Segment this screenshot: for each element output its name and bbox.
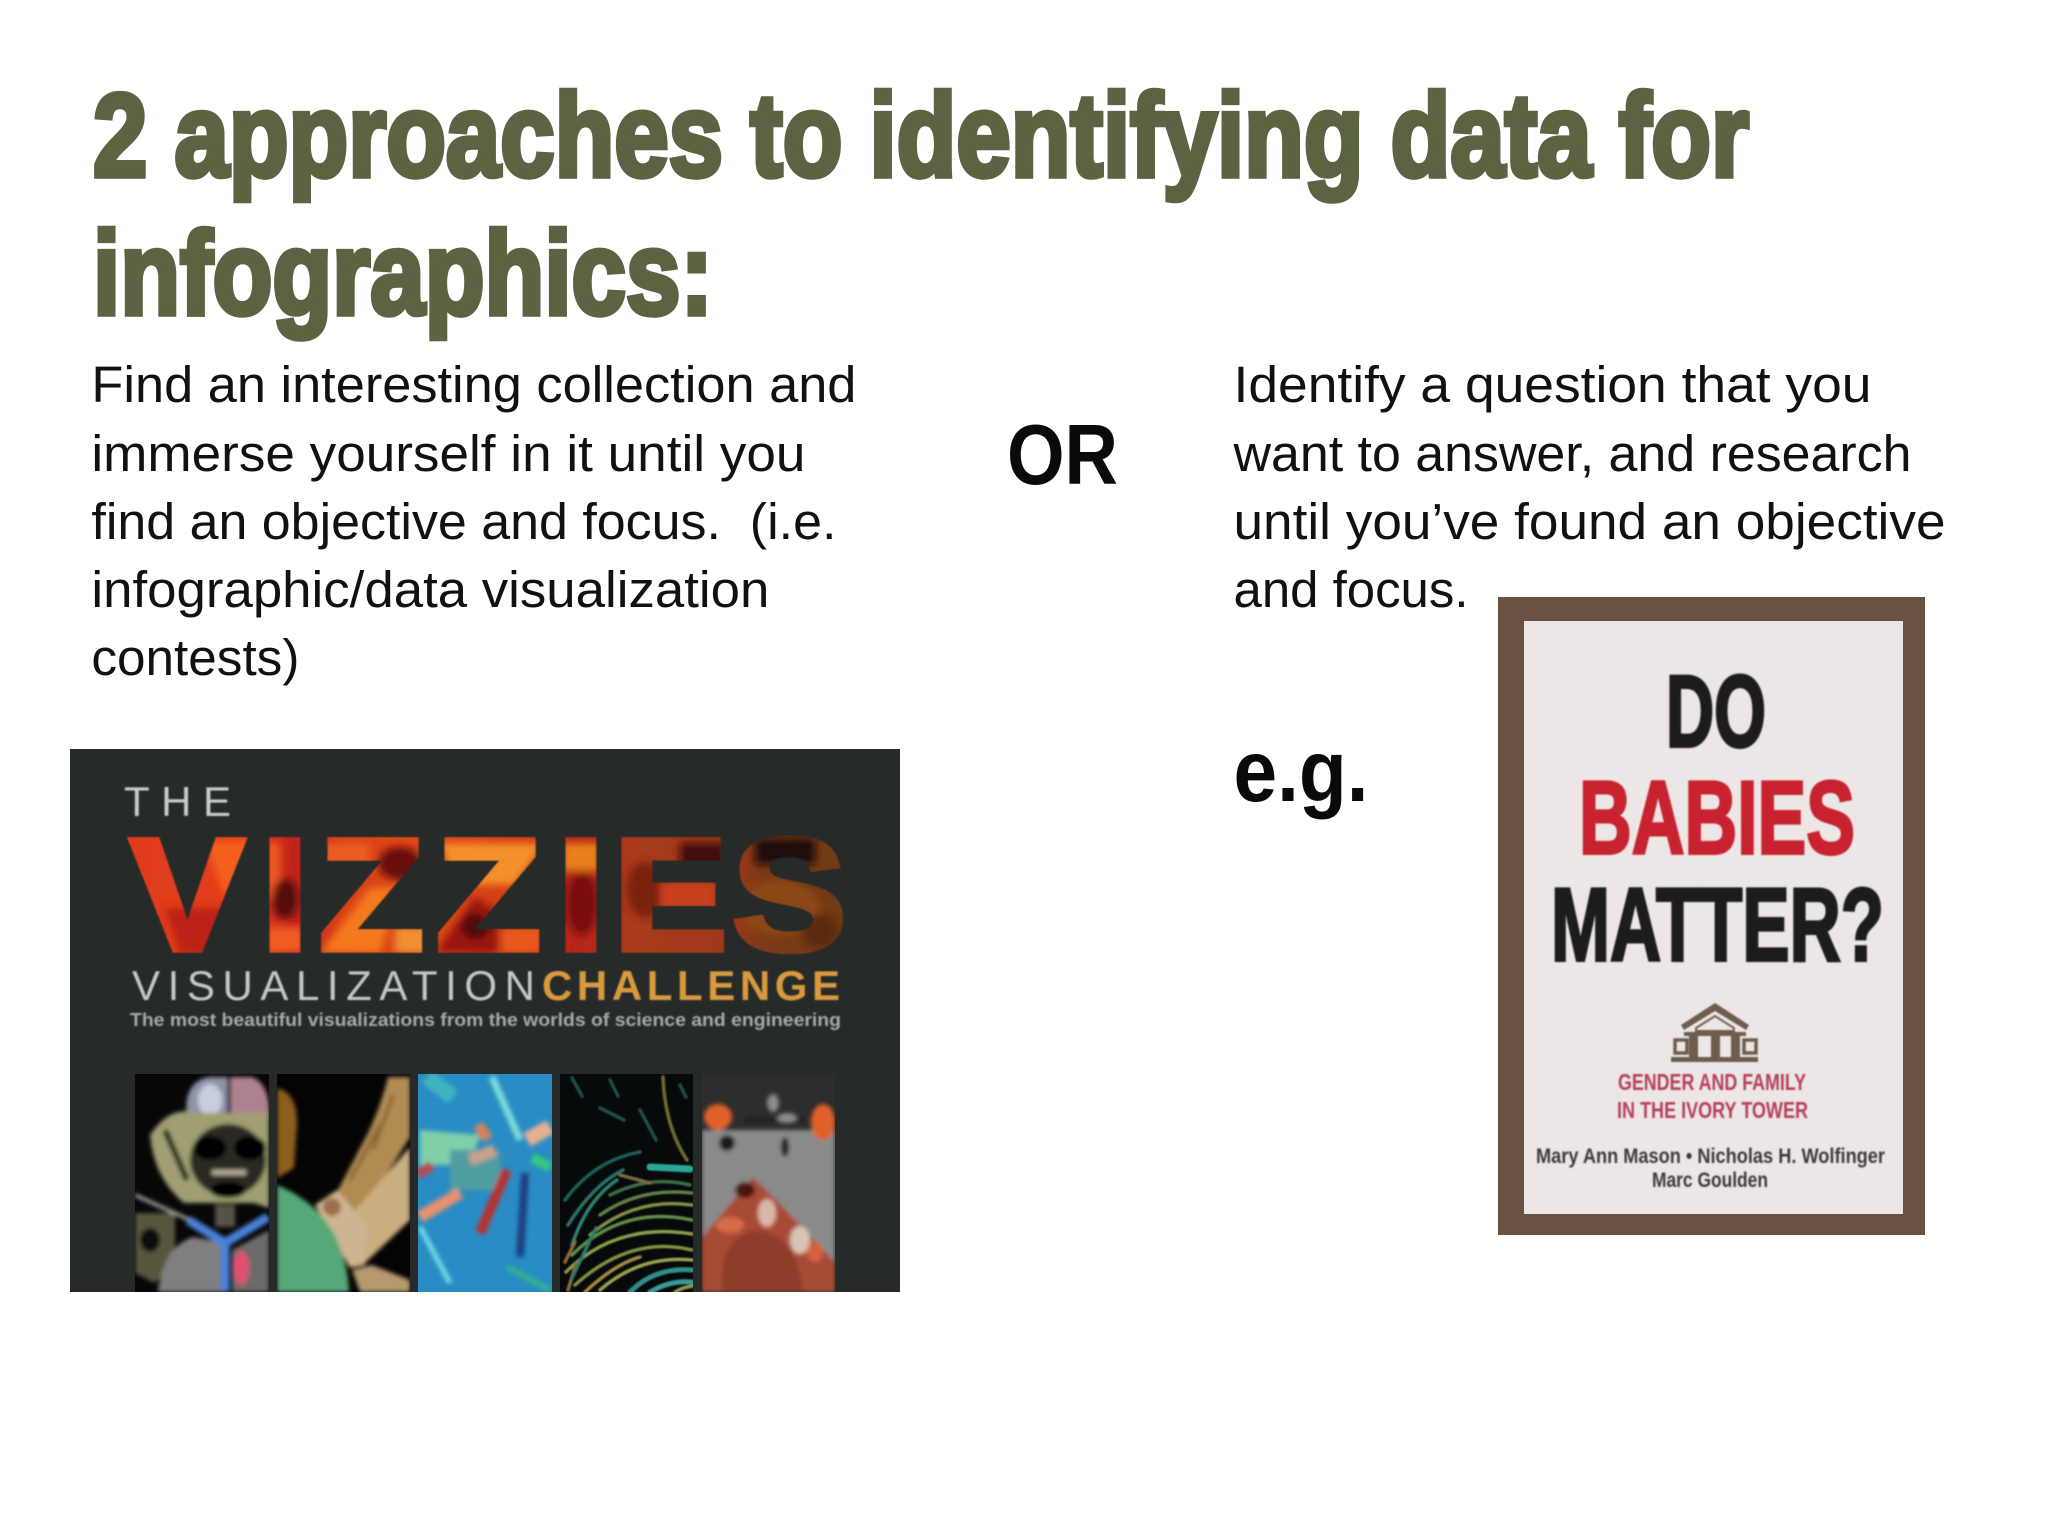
book title: BABIES: BABIES	[1579, 760, 1855, 876]
book authors: Mary Ann Mason • Nicholas H. Wolfinger	[1536, 1145, 1885, 1168]
book subtitle: IN THE IVORY TOWER	[1617, 1097, 1808, 1123]
cover heading: VIZZIES: VIZZIES	[130, 806, 847, 985]
icon: university building	[1671, 1003, 1758, 1062]
panel: Vizzies cover	[70, 749, 900, 1292]
text block: find a collection	[91, 356, 856, 686]
text block: identify a question: and focus.	[1234, 561, 1468, 618]
book authors	[1536, 1145, 1885, 1192]
e.g. label: e.g.	[1234, 723, 1368, 820]
text block: find a collection: contests)	[91, 629, 299, 686]
book subtitle: GENDER AND FAMILY	[1618, 1069, 1806, 1095]
image strip: red and grey cross-section	[702, 1074, 835, 1292]
image strip: blue streaks	[418, 1074, 552, 1292]
book subtitle	[1617, 1069, 1808, 1123]
image strip: coloured filaments	[560, 1074, 693, 1292]
text block: find a collection: immerse yourself in it until you	[91, 425, 805, 482]
OR label: OR	[1007, 408, 1118, 503]
title: 2 approaches to identifying data for	[93, 70, 1749, 202]
text block: identify a question: until you’ve found an objective	[1234, 493, 1946, 550]
book title: MATTER?: MATTER?	[1551, 868, 1884, 984]
text block: identify a question	[1232, 356, 1946, 618]
cover tagline: The most beautiful visualizations from the worlds of science and engineering	[130, 1010, 841, 1030]
image strip: anatomy	[135, 1074, 269, 1292]
cover heading: THE: THE	[124, 778, 231, 825]
image strip: fibres and sphere	[277, 1074, 410, 1292]
text block: identify a question: Identify a question that you	[1234, 356, 1872, 413]
text block: find a collection: infographic/data visualization	[91, 561, 769, 618]
text block: find a collection: Find an interesting collection and	[91, 356, 856, 413]
title	[93, 70, 1749, 340]
book authors: Marc Goulden	[1652, 1169, 1768, 1192]
cover subheading: visualization: VISUALIZATION	[132, 962, 535, 1009]
panel: book cover	[1498, 597, 1925, 1235]
slide	[70, 88, 1944, 1292]
book title: DO: DO	[1666, 654, 1766, 768]
text block: find a collection: find an objective and focus. (i.e.	[91, 493, 836, 550]
title: infographics:	[93, 208, 713, 340]
cover subheading: challenge: CHALLENGE	[542, 962, 840, 1009]
text block: identify a question: want to answer, and research	[1232, 425, 1912, 482]
